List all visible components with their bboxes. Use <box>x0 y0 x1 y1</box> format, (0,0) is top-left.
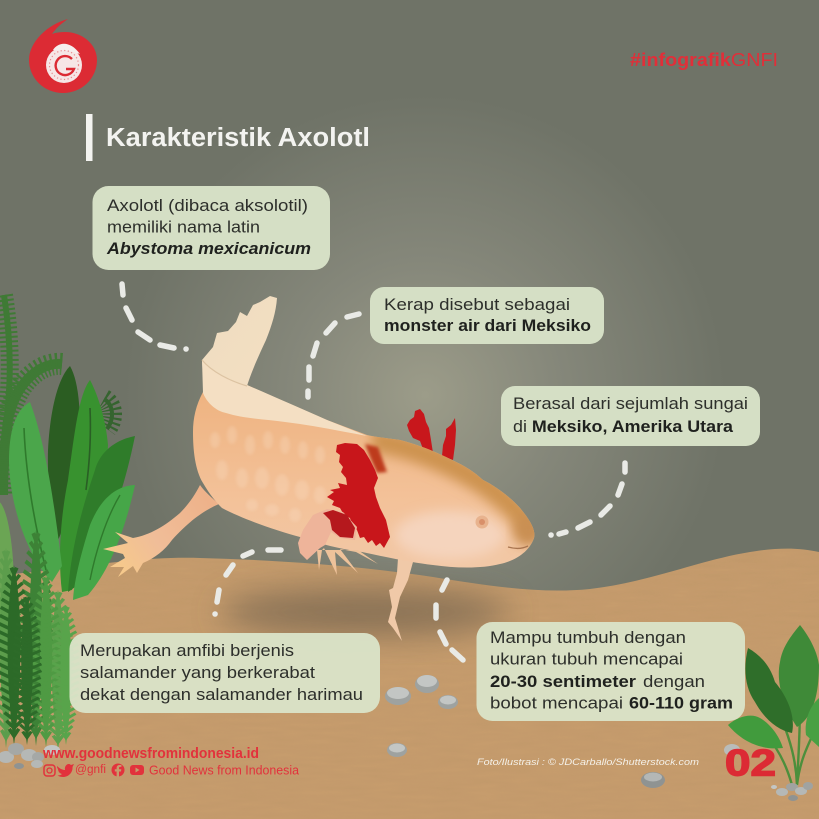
footer website: www.goodnewsfromindonesia.id <box>42 746 259 762</box>
dashed connector 5 <box>436 580 463 660</box>
callout: ukuran: 60-110 gram <box>629 694 733 712</box>
small fern <box>104 399 112 429</box>
gill base <box>365 444 387 473</box>
head golden top <box>372 440 534 536</box>
callout: ukuran <box>476 622 745 721</box>
callout: ukuran: Mampu tumbuh dengan <box>490 629 686 647</box>
callout: asal <box>501 386 760 446</box>
back fern left edge <box>2 295 10 450</box>
logo emblem <box>46 44 82 83</box>
sand ground <box>0 549 819 819</box>
pale stem block <box>0 500 14 640</box>
pebble <box>385 687 411 705</box>
icon: youtube <box>130 765 144 775</box>
logo mark <box>29 19 97 93</box>
back leaf <box>779 625 819 727</box>
lower right leg <box>388 558 413 641</box>
callout: nama latin <box>92 186 330 270</box>
mouth <box>508 546 528 548</box>
head pale underside <box>395 511 505 559</box>
dorsal fin fold <box>202 360 367 436</box>
dashed connector 3 <box>551 463 625 535</box>
photo credit: Foto/Ilustrasi : © JDCarballo/Shutterstock.com <box>477 757 699 768</box>
callout: amfibi: salamander yang berkerabat <box>80 664 315 682</box>
tail fin <box>202 296 277 393</box>
icon: instagram <box>44 765 55 776</box>
callout: nama latin: memiliki nama latin <box>107 218 260 236</box>
logo <box>29 19 97 93</box>
dashed connector 2 <box>308 314 359 397</box>
callout: ukuran: bobot mencapai <box>490 694 623 712</box>
icon: twitter <box>57 764 74 777</box>
front light leaf <box>73 485 135 600</box>
scale spots <box>210 426 326 522</box>
stems <box>766 700 815 785</box>
callout: ukuran: ukuran tubuh mencapai <box>490 650 683 668</box>
callout: ukuran: 20-30 sentimeter <box>490 673 637 691</box>
body shading <box>210 426 542 559</box>
snout <box>514 514 542 546</box>
low fern clump <box>0 548 21 748</box>
callout: amfibi: Merupakan amfibi berjenis <box>80 642 294 660</box>
front leg <box>298 509 357 560</box>
light green leaf <box>9 402 62 582</box>
callout: monster air: Kerap disebut sebagai <box>384 296 570 314</box>
axolotl <box>103 296 542 641</box>
dark green leaf <box>68 436 135 592</box>
dashed connector 1 <box>122 284 186 349</box>
dark leaf <box>48 366 80 540</box>
body <box>193 385 534 568</box>
callout: monster air: monster air dari Meksiko <box>384 317 591 335</box>
dark leaf <box>745 648 793 733</box>
callout: monster air <box>370 287 604 344</box>
red gills <box>327 443 390 548</box>
mid green leaf <box>60 380 108 592</box>
front leg red patch <box>323 510 355 538</box>
callout: nama latin: Abystoma mexicanicum <box>106 240 311 258</box>
back fern arching <box>3 364 62 495</box>
axolotl shadow on sand <box>220 588 510 636</box>
tail curl edge <box>202 360 247 386</box>
callout: amfibi: dekat dengan salamander harimau <box>80 686 363 704</box>
footer social <box>44 764 299 778</box>
front leaf <box>728 716 783 748</box>
pebbles <box>0 675 813 801</box>
left plants <box>0 295 135 750</box>
icon: facebook <box>112 764 124 777</box>
callout: asal: di Meksiko, Amerika Utara <box>513 418 734 436</box>
title bar <box>86 114 92 161</box>
sand texture <box>0 540 819 819</box>
right plant <box>728 625 819 785</box>
back gills <box>407 409 456 460</box>
handle: @gnfi <box>75 764 106 776</box>
dashed connector 4 <box>215 550 281 614</box>
callout: ukuran: dengan <box>643 673 705 691</box>
right leaf <box>806 698 819 747</box>
callout: nama latin: Axolotl (dibaca aksolotil) <box>107 197 308 215</box>
callout: amfibi <box>70 633 380 713</box>
hashtag: #infografik GNFI <box>630 49 778 70</box>
rear leg <box>103 485 219 577</box>
title: Karakteristik Axolotl <box>106 124 370 152</box>
eye <box>476 516 488 528</box>
channel name: Good News from Indonesia <box>149 764 299 778</box>
page number: 02 <box>725 742 776 784</box>
front toes <box>317 548 378 575</box>
callout: asal: Berasal dari sejumlah sungai <box>513 395 748 413</box>
